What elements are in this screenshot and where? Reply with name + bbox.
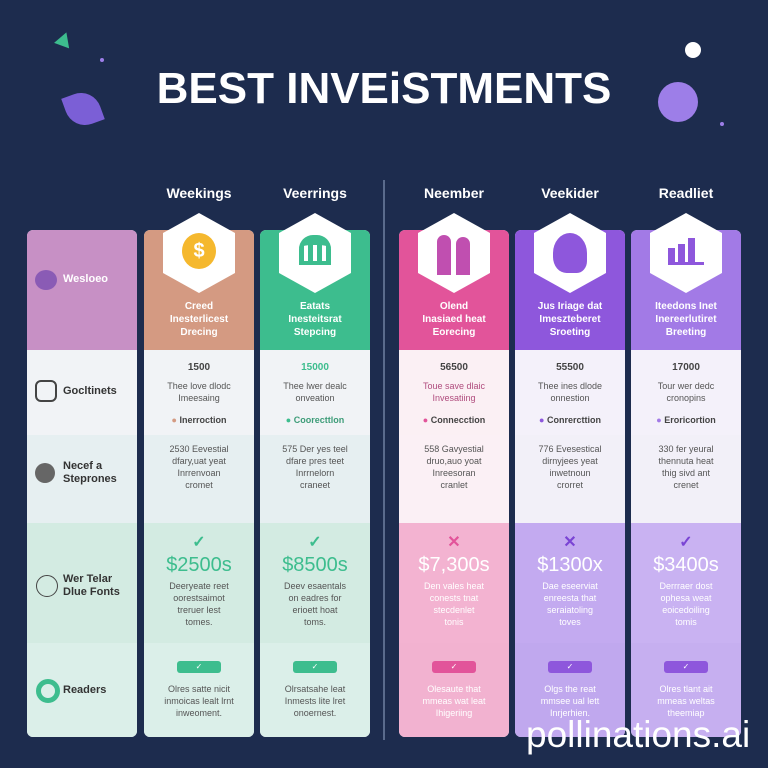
panel: column 5: Inereerlutiret	[655, 314, 717, 325]
watermark: pollinations.ai	[526, 714, 750, 755]
panel: column 5: Tour wer dedc	[658, 381, 714, 391]
panel: column 4: seraiatoling	[547, 605, 593, 615]
panel: column 1: ✓	[192, 534, 206, 551]
panel: column 5: tomis	[675, 617, 697, 627]
panel: column 1: Thee love dlodc	[167, 381, 231, 391]
panel: column 2: 575 Der yes teel	[282, 444, 348, 454]
panel: column 3: Den vales heat	[424, 581, 484, 591]
panel: column 3: Olend	[440, 301, 468, 312]
panel: column 5: thig sivd ant	[662, 468, 710, 478]
panel: column 5: cronopins	[666, 393, 706, 403]
panel: column 5: ● Eroricortion	[656, 415, 716, 425]
panel: column 2: ✓	[308, 534, 322, 551]
icon: people	[418, 213, 490, 293]
panel: column 4: toves	[559, 617, 581, 627]
divider	[383, 180, 385, 740]
panel: column 5: thennuta heat	[658, 456, 714, 466]
panel: column 5: eoicedoiling	[662, 605, 710, 615]
panel: column 4: Thee ines dlode	[538, 381, 602, 391]
panel: column 3: Invesatiing	[432, 393, 476, 403]
panel: column 1: dfary,uat yeat	[172, 456, 226, 466]
panel: column 3: cranlet	[440, 480, 468, 490]
panel: row labels: Wer Telar	[63, 573, 112, 585]
panel: column 5	[631, 230, 741, 737]
panel: column 1: inmoicas lealt lrnt	[164, 696, 234, 706]
panel: column 3	[399, 230, 509, 737]
panel: column 2: craneet	[300, 480, 330, 490]
panel: column 5: mmeas weltas	[657, 696, 715, 706]
panel: column 2	[260, 230, 370, 737]
panel: column 1: Creed	[185, 301, 213, 312]
panel: column 1: Olres satte nicit	[168, 684, 230, 694]
decorative shapes	[54, 32, 724, 126]
column 1 header: Weekings	[166, 185, 232, 201]
panel: column 3: ✕	[447, 534, 461, 551]
panel: column 4: crorret	[557, 480, 583, 490]
panel: column 3: conests tnat	[430, 593, 478, 603]
panel: column 3: 558 Gavyestial	[424, 444, 484, 454]
panel: column 2: Inrrnelorn	[296, 468, 334, 478]
panel: column 2: onoernest.	[294, 708, 336, 718]
panel: column 1: Inrrenvoan	[177, 468, 221, 478]
panel: column 4: 776 Evesestical	[538, 444, 602, 454]
panel: column 1: oorestsaimot	[173, 593, 225, 603]
panel: column 4: Sroeting	[550, 327, 590, 338]
panel: column 2: Deev esaentals	[284, 581, 346, 591]
panel: column 2: Inesteitsrat	[288, 314, 342, 325]
panel: column 1: ✓	[196, 662, 202, 671]
panel: column 5: crenet	[673, 480, 698, 490]
panel: column 2: Thee lwer dealc	[283, 381, 347, 391]
panel: column 3: Inreesoran	[432, 468, 476, 478]
panel: row labels: Wesloeo	[63, 273, 108, 285]
panel: column 1: tomes.	[185, 617, 212, 627]
column 4 header: Veekider	[541, 185, 599, 201]
panel: row labels: Gocltinets	[63, 385, 117, 397]
panel: column 1: cromet	[185, 480, 213, 490]
panel: column 5: $3400s	[653, 554, 719, 576]
panel: column 5: Olres tlant ait	[659, 684, 713, 694]
column 5 header: Readliet	[659, 185, 713, 201]
panel: column 4: inwetnoun	[549, 468, 591, 478]
column 3 header: Neember	[424, 185, 484, 201]
panel: column 1: inweoment.	[176, 708, 222, 718]
panel: column 3: mmeas wat leat	[422, 696, 486, 706]
icon: bank	[279, 213, 351, 293]
column 2 header: Veerrings	[283, 185, 347, 201]
panel: column 2: $8500s	[282, 554, 348, 576]
panel: column 5: ophesa weat	[660, 593, 712, 603]
panel: column 1: Imeesaing	[178, 393, 220, 403]
panel: column 5: 330 fer yeural	[658, 444, 714, 454]
panel: column 2: 15000	[301, 362, 329, 373]
panel: column 2: Eatats	[300, 301, 330, 312]
panel: column 2: ✓	[312, 662, 318, 671]
panel: column 2: ● Coorecttlon	[286, 415, 344, 425]
panel: column 3: ✓	[451, 662, 457, 671]
panel: row labels: Necef a	[63, 460, 102, 472]
panel: column 4: 55500	[556, 362, 584, 373]
panel: column 3: Toue save dlaic	[423, 381, 485, 391]
panel: column 5: theemiap	[667, 708, 705, 718]
panel: column 3: 56500	[440, 362, 468, 373]
panel: column 2: Inmests lite lret	[285, 696, 345, 706]
panel: column 2: erioett hoat	[292, 605, 338, 615]
panel: column 4: Inrjerhien.	[550, 708, 590, 718]
panel: column 3: Olesaute that	[427, 684, 481, 694]
panel: column 1: Drecing	[180, 327, 218, 338]
panel: column 4: onnestion	[550, 393, 590, 403]
panel: column 2: Stepcing	[294, 327, 336, 338]
panel: column 1: Deeryeate reet	[169, 581, 229, 591]
icon: bar chart	[650, 213, 722, 293]
panel: row labels	[27, 230, 137, 737]
panel: column 1: treruer lest	[177, 605, 220, 615]
title: BEST INVEiSTMENTS	[157, 64, 611, 113]
panel: column 4: enreesta that	[544, 593, 596, 603]
panel: column 1: 1500	[188, 362, 210, 373]
panel: column 4: mmsee ual lett	[541, 696, 599, 706]
panel: column 3: Ihigeriing	[436, 708, 472, 718]
icon: head	[534, 213, 606, 293]
panel: column 3: $7,300s	[418, 554, 490, 576]
panel: column 3: stecdenlet	[433, 605, 475, 615]
panel: column 4: ✕	[563, 534, 577, 551]
panel: column 5: Derrraer dost	[659, 581, 712, 591]
panel: column 1: 2530 Eevestial	[169, 444, 229, 454]
panel: column 1: Inesterlicest	[170, 314, 228, 325]
panel: column 1: $2500s	[166, 554, 232, 576]
panel: column 4: ● Conrercttion	[539, 415, 601, 425]
panel: column 5: 17000	[672, 362, 700, 373]
panel: column 4	[515, 230, 625, 737]
panel: column 4: Jus Iriage dat	[538, 301, 602, 312]
panel: row labels: Dlue Fonts	[63, 586, 120, 598]
panel: column 1: ● Inerroction	[172, 415, 226, 425]
panel: column 4: $1300x	[537, 554, 603, 576]
icon: coin: $	[193, 240, 205, 262]
panel: column 3: tonis	[444, 617, 464, 627]
panel: column 3: ● Connecction	[423, 415, 485, 425]
panel: column 3: druo,auo yoat	[426, 456, 482, 466]
panel: column 4: Olgs the reat	[544, 684, 596, 694]
panel: column 4: Imeszteberet	[539, 314, 601, 325]
panel: column 2: on eadres for	[288, 593, 342, 603]
panel: column 5: ✓	[683, 662, 689, 671]
panel: column 3: Inasiaed heat	[422, 314, 486, 325]
panel: column 4: ✓	[567, 662, 573, 671]
panel: column 4: dirnyjees yeat	[542, 456, 598, 466]
panel: column 2: onveation	[295, 393, 335, 403]
panel: column 5: ✓	[679, 534, 693, 551]
panel: row labels: Steprones	[63, 473, 117, 485]
panel: column 1	[144, 230, 254, 737]
panel: column 2: dfare pres teet	[286, 456, 344, 466]
panel: column 5: Breeting	[666, 327, 706, 338]
panel: column 2: Olrsatsahe leat	[285, 684, 345, 694]
panel: row labels: Readers	[63, 684, 106, 696]
panel: column 5: Iteedons Inet	[655, 301, 717, 312]
panel: column 4: Dae eseerviat	[542, 581, 598, 591]
panel: column 3: Eorecing	[433, 327, 475, 338]
panel: column 2: toms.	[304, 617, 326, 627]
icon: coin	[163, 213, 235, 293]
